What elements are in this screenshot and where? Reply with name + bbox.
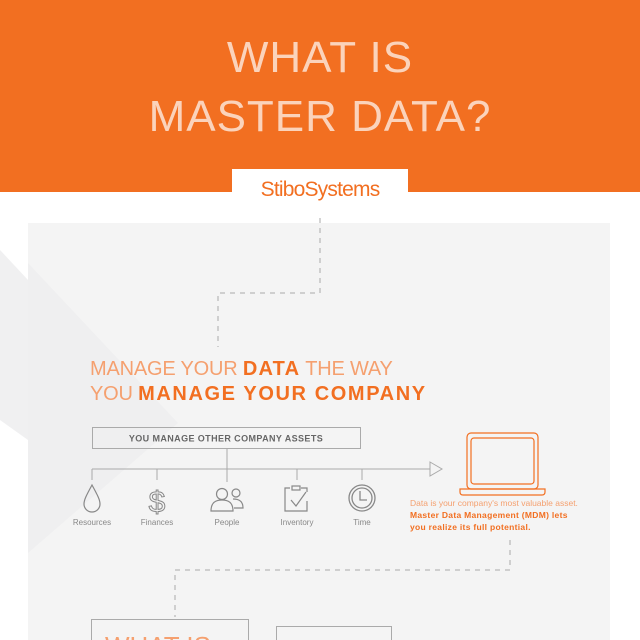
logo box: StiboSystems bbox=[261, 178, 379, 201]
labels: Time bbox=[353, 518, 371, 527]
header band bbox=[0, 0, 640, 192]
icon: drop bbox=[84, 485, 100, 512]
heading: MANAGE YOUR DATA THE WAY bbox=[90, 358, 393, 380]
icon: people bbox=[211, 488, 243, 511]
gray panel bbox=[28, 223, 610, 640]
title: WHAT IS bbox=[227, 33, 413, 82]
logo box bbox=[232, 169, 408, 205]
box: what is bbox=[92, 620, 248, 640]
labels: People bbox=[215, 518, 240, 527]
heading bbox=[90, 358, 427, 405]
heading: YOU MANAGE YOUR COMPANY bbox=[90, 383, 427, 405]
assets box: YOU MANAGE OTHER COMPANY ASSETS bbox=[129, 434, 323, 444]
box 2 bbox=[276, 626, 392, 640]
title bbox=[149, 33, 491, 141]
MDM text: you realize its full potential. bbox=[410, 522, 531, 532]
title: MASTER DATA? bbox=[149, 92, 491, 141]
icon: dollar: $ bbox=[149, 486, 166, 519]
MDM text: Master Data Management (MDM) lets bbox=[410, 510, 568, 520]
labels: Inventory bbox=[281, 518, 313, 527]
labels bbox=[73, 518, 371, 527]
icon: laptop bbox=[460, 433, 545, 495]
tree lines and arrow bbox=[92, 449, 442, 482]
dashed connector bottom bbox=[175, 540, 510, 617]
MDM text bbox=[410, 498, 578, 532]
labels: Resources bbox=[73, 518, 111, 527]
icon: clipboard bbox=[285, 486, 307, 511]
labels: Finances bbox=[141, 518, 173, 527]
assets box bbox=[92, 428, 360, 448]
icon: clock bbox=[349, 485, 375, 511]
dashed connector top bbox=[218, 218, 320, 347]
MDM text: Data is your company's most valuable asset. bbox=[410, 498, 578, 508]
left decorative shapes bbox=[0, 250, 28, 440]
